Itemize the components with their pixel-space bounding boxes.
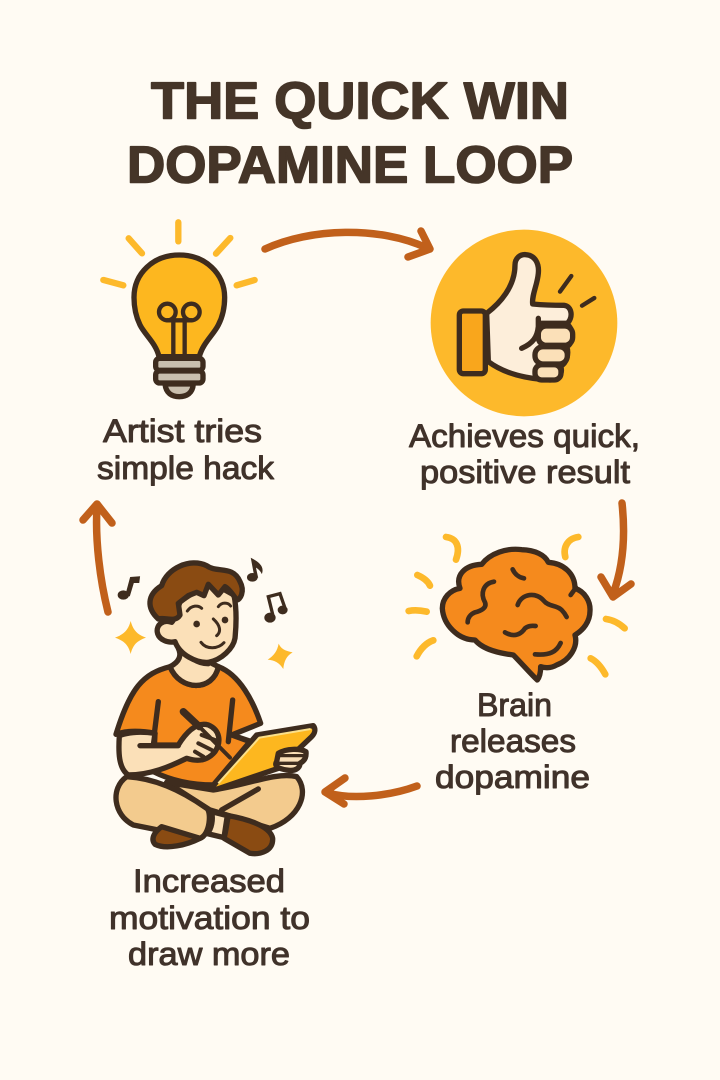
label: step 2: Achieves quick, [409,418,640,454]
shoes [207,812,227,838]
badge circle [431,230,617,416]
far arm skin [232,735,252,762]
label: step 1: simple hack [97,450,275,486]
label: step 1 [97,413,275,486]
label: step 4 [109,863,310,972]
head [157,582,236,662]
shine marks [560,276,594,306]
face [187,603,231,664]
arrow: brain to motivation [325,778,417,804]
arrow: idea to result [265,231,430,257]
icon: brain [409,537,625,680]
label: step 3 [435,687,590,795]
label: step 4: motivation to [109,900,310,936]
label: step 2 [409,418,640,490]
tablet [212,726,315,789]
legs [167,776,302,828]
title: THE QUICK WIN [151,72,569,130]
title [127,72,573,194]
label: step 4: Increased [133,863,285,899]
sparkles [115,621,146,654]
icon: light bulb [103,222,255,397]
arm and stylus [119,724,219,775]
shirt [116,667,261,785]
arrow: result to brain [601,503,631,597]
arrow: motivation to idea [83,504,112,612]
label: step 2: positive result [420,454,630,490]
music notes [118,559,287,622]
hand on tablet [276,749,306,770]
label: step 3: dopamine [435,759,590,795]
title: DOPAMINE LOOP [127,136,573,194]
icon: artist drawing on tablet [115,559,315,854]
label: step 1: Artist tries [103,413,262,449]
icon: thumbs up badge [431,230,617,416]
label: step 4: draw more [128,936,290,972]
hair [150,563,242,619]
neck [170,648,218,685]
label: step 3: releases [450,723,576,759]
label: step 3: Brain [477,687,552,723]
thumb hand [459,255,573,380]
